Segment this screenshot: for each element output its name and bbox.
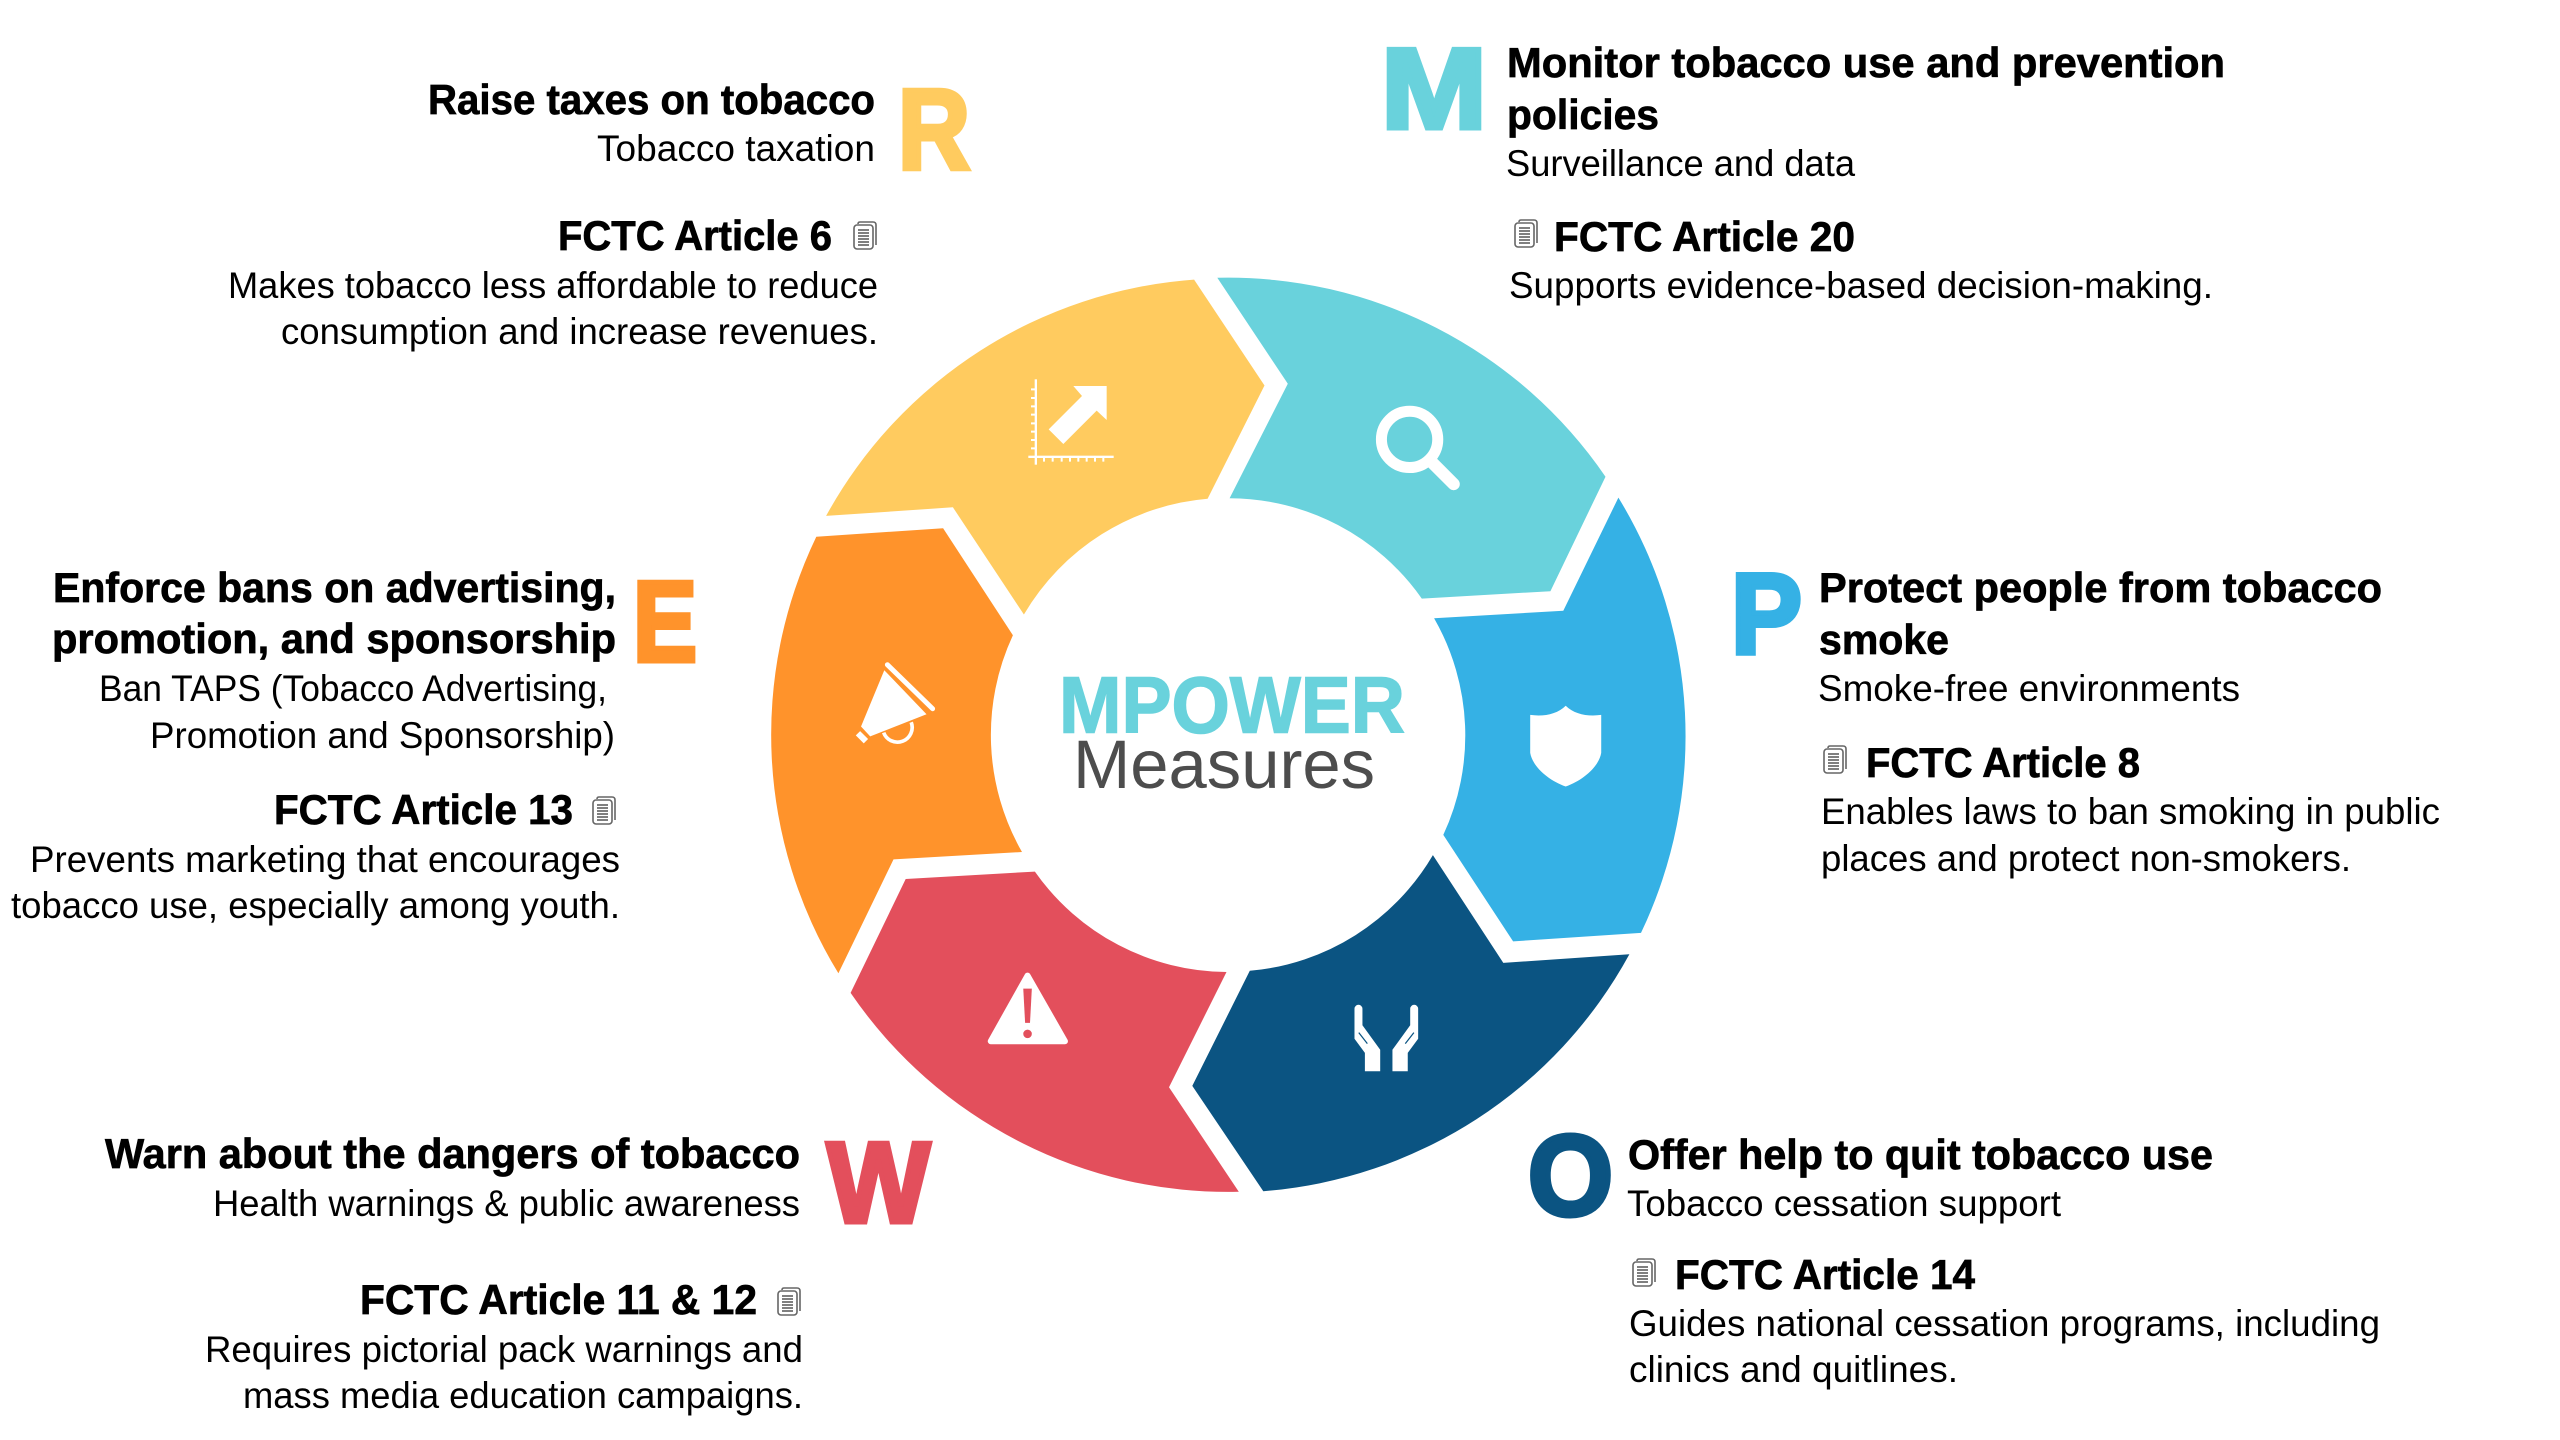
heading R: Raise taxes on tobacco	[428, 76, 875, 123]
panel: R raise taxes	[228, 67, 970, 352]
icon: magnifying glass	[1381, 411, 1454, 484]
letter W: W	[827, 1120, 930, 1247]
description O: clinics and quitlines.	[1629, 1349, 1958, 1390]
letter M: M	[1381, 26, 1487, 153]
heading M: policies	[1507, 91, 1659, 138]
description R: Makes tobacco less affordable to reduce	[228, 265, 878, 306]
heading W: Warn about the dangers of tobacco	[105, 1130, 800, 1177]
ring diagram	[771, 278, 1686, 1192]
icon: chart with rising arrow	[1028, 379, 1114, 465]
subheading E	[99, 668, 615, 756]
subheading M: Surveillance and data	[1506, 143, 1855, 184]
center title	[1059, 661, 1405, 803]
heading E: Enforce bans on advertising,	[53, 564, 616, 611]
description W: mass media education campaigns.	[243, 1375, 803, 1416]
heading P: smoke	[1819, 616, 1949, 663]
panel: M monitor	[1381, 26, 2225, 306]
panel: E enforce	[11, 559, 697, 926]
article heading P: FCTC Article 8	[1866, 739, 2140, 786]
description E: Prevents marketing that encourages	[30, 839, 620, 880]
description R	[228, 265, 878, 352]
segment: P blue	[1434, 498, 1686, 941]
description M: Supports evidence-based decision-making.	[1509, 265, 2213, 306]
subheading P: Smoke-free environments	[1818, 668, 2240, 709]
segment: E orange	[771, 528, 1022, 973]
letter P: P	[1731, 551, 1802, 678]
icon: document W	[778, 1288, 800, 1315]
description W: Requires pictorial pack warnings and	[205, 1329, 803, 1370]
letter O: O	[1528, 1113, 1613, 1240]
heading E: promotion, and sponsorship	[52, 615, 616, 662]
article heading M: FCTC Article 20	[1554, 213, 1855, 260]
subheading O: Tobacco cessation support	[1627, 1183, 2062, 1224]
icon: helping hands	[1354, 1005, 1418, 1071]
MPOWER heading: MPOWER	[1059, 661, 1405, 750]
description P: Enables laws to ban smoking in public	[1821, 791, 2440, 832]
heading M	[1507, 39, 2225, 138]
Measures heading: Measures	[1073, 726, 1375, 803]
icon: document R	[854, 222, 876, 249]
heading P: Protect people from tobacco	[1819, 564, 2382, 611]
subheading E: Promotion and Sponsorship)	[150, 715, 615, 756]
subheading R: Tobacco taxation	[597, 128, 875, 169]
panel: O offer	[1528, 1113, 2380, 1390]
article heading E: FCTC Article 13	[274, 786, 573, 833]
icon: shield	[1530, 706, 1601, 787]
article heading O: FCTC Article 14	[1675, 1251, 1976, 1298]
description E	[11, 839, 620, 926]
segment: O navy	[1192, 855, 1629, 1191]
subheading E: Ban TAPS (Tobacco Advertising,	[99, 668, 607, 709]
description O	[1629, 1303, 2380, 1390]
description E: tobacco use, especially among youth.	[11, 885, 620, 926]
segment: M teal	[1217, 278, 1606, 599]
icon: megaphone	[858, 665, 933, 742]
description W	[205, 1329, 803, 1416]
icon: warning triangle	[991, 976, 1065, 1041]
icon: document M	[1515, 220, 1537, 247]
letter R: R	[898, 67, 970, 194]
segment: W red	[851, 872, 1239, 1192]
description P: places and protect non-smokers.	[1821, 838, 2351, 879]
article heading R: FCTC Article 6	[558, 212, 832, 259]
icon: document O	[1633, 1259, 1655, 1286]
description R: consumption and increase revenues.	[281, 311, 878, 352]
heading E	[52, 564, 616, 662]
heading M: Monitor tobacco use and prevention	[1507, 39, 2225, 86]
segment: R yellow	[826, 280, 1264, 614]
description P	[1821, 791, 2440, 879]
icon: document E	[593, 797, 615, 824]
article heading W: FCTC Article 11 & 12	[360, 1276, 757, 1323]
icon: document P	[1824, 746, 1846, 773]
panel: W warn	[105, 1120, 930, 1416]
letter E: E	[633, 559, 697, 686]
subheading W: Health warnings & public awareness	[213, 1183, 800, 1224]
heading O: Offer help to quit tobacco use	[1628, 1131, 2213, 1178]
description O: Guides national cessation programs, including	[1629, 1303, 2380, 1344]
heading P	[1819, 564, 2382, 663]
panel: P protect	[1731, 551, 2440, 879]
